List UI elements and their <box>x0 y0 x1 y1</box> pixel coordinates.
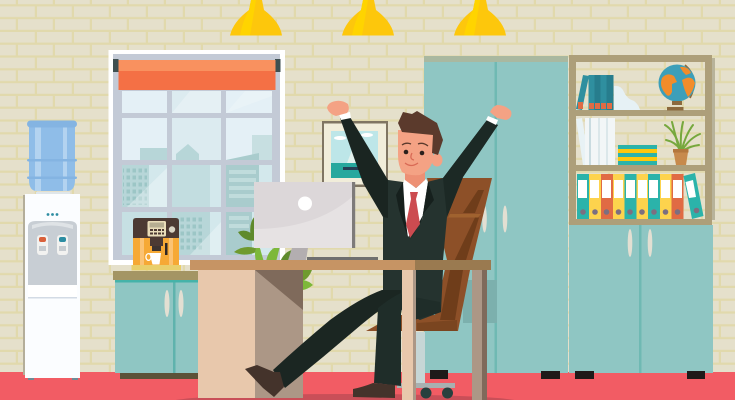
lower cabinet handles <box>628 229 632 257</box>
right shoe <box>353 383 395 398</box>
machine display panel <box>148 221 166 236</box>
businessman upper body and right leg top <box>327 101 511 323</box>
raised left arm <box>340 117 388 218</box>
jacket lapels <box>396 182 408 238</box>
plant pot <box>673 149 688 165</box>
coloured binders row <box>577 173 704 219</box>
tall wardrobe <box>424 56 568 379</box>
blue books <box>576 75 614 110</box>
desk pedestal <box>198 270 255 398</box>
thigh behind desk leg <box>398 294 441 323</box>
right sleeve shade <box>443 120 498 217</box>
white binders <box>576 118 615 165</box>
desktop <box>190 260 415 270</box>
ear <box>432 154 442 166</box>
desk rear leg <box>472 270 482 400</box>
keyboard <box>307 257 378 260</box>
plant leaves <box>250 215 259 238</box>
torso below desk <box>383 270 443 320</box>
building windows <box>123 167 256 252</box>
desk <box>190 260 491 400</box>
bookshelf <box>569 55 715 225</box>
red floor <box>0 372 735 400</box>
right fist <box>490 105 511 120</box>
drip tray <box>28 285 77 297</box>
jacket torso <box>383 120 498 260</box>
left fist <box>327 101 349 116</box>
face <box>398 130 433 175</box>
cold tap <box>57 235 68 255</box>
computer monitor <box>254 182 378 260</box>
floor shadow <box>170 394 520 400</box>
logo circle <box>298 196 312 210</box>
small cabinet <box>113 271 198 379</box>
city skyline through panes <box>122 135 272 255</box>
water bottle <box>27 120 77 194</box>
globe <box>658 64 696 110</box>
chair back and seat <box>366 178 492 331</box>
lower cabinet feet <box>575 371 594 379</box>
shirt <box>403 179 428 237</box>
water cooler <box>23 120 80 380</box>
monitor stand <box>288 229 311 260</box>
hair <box>398 111 443 155</box>
extended leg <box>273 290 401 388</box>
left cuff <box>339 112 351 120</box>
wardrobe feet <box>430 370 448 379</box>
machine knob <box>169 226 175 233</box>
neck <box>405 168 425 188</box>
desk front leg <box>402 270 413 400</box>
office chair <box>366 178 492 398</box>
binder rings <box>580 208 699 215</box>
roller blind brackets <box>113 59 118 72</box>
cabinet handles <box>164 290 170 317</box>
nose and smile <box>405 153 418 166</box>
eyebrows <box>402 143 428 146</box>
roller blind <box>118 60 276 71</box>
window <box>108 50 285 265</box>
stacked folders <box>618 145 657 165</box>
standing leg <box>374 293 401 386</box>
red tie <box>406 192 420 238</box>
shelf plant <box>665 122 700 165</box>
lamp 1 <box>230 0 282 36</box>
indicator dots <box>47 213 58 216</box>
left shoe <box>245 365 284 397</box>
monitor back <box>254 182 352 248</box>
dispenser recess <box>28 221 77 285</box>
ceiling lamps <box>230 0 506 36</box>
binder labels <box>578 180 696 198</box>
potted plant behind desk <box>234 215 313 290</box>
eyes <box>404 150 408 154</box>
framed picture <box>322 121 388 187</box>
wardrobe handles <box>482 206 487 232</box>
coffee machine <box>132 218 181 270</box>
lamp 3 <box>454 0 506 36</box>
lamp 2 <box>342 0 394 36</box>
lower cabinet <box>569 225 713 379</box>
white bookend <box>614 86 640 110</box>
right cuff <box>486 116 498 125</box>
window panes <box>122 91 272 255</box>
monitor side edge <box>352 182 355 248</box>
hot tap <box>37 235 48 255</box>
businessman legs in front of desk <box>245 290 401 398</box>
coffee cup <box>146 253 161 264</box>
glass reflections <box>127 91 272 255</box>
